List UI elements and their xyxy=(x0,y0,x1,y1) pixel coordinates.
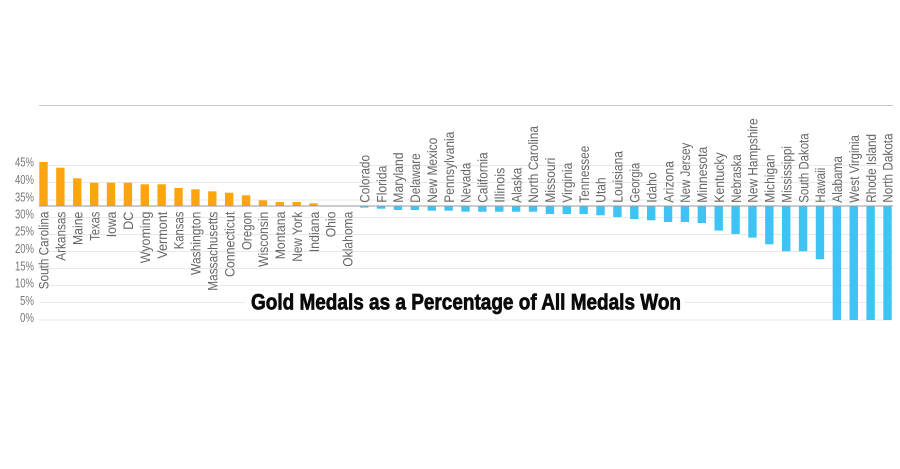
y axis labels: 0% xyxy=(20,310,34,325)
state labels above baseline: Maryland xyxy=(391,152,406,203)
state labels below baseline: Connecticut xyxy=(222,211,237,277)
state labels above baseline: Alaska xyxy=(509,167,524,203)
y axis labels: 40% xyxy=(15,172,34,187)
state labels above baseline: Florida xyxy=(374,165,389,203)
state labels above baseline: Arizona xyxy=(661,161,676,203)
blue bars: below average xyxy=(360,206,892,320)
y axis labels xyxy=(15,154,34,325)
y axis labels: 30% xyxy=(15,206,34,222)
state labels above baseline: Delaware xyxy=(408,153,423,203)
state labels below baseline: Iowa xyxy=(104,211,119,237)
state labels above baseline: Tennessee xyxy=(577,146,592,203)
state labels above baseline: Utah xyxy=(594,177,609,203)
state labels above baseline: Mississippi xyxy=(779,146,794,203)
state labels above baseline: Michigan xyxy=(762,154,778,203)
y axis labels: 5% xyxy=(20,293,34,308)
title: Gold Medals as a Percentage of All Medals Won xyxy=(251,289,681,314)
state labels below baseline: DC xyxy=(121,211,136,230)
state labels below baseline: Arkansas xyxy=(54,211,69,261)
state labels above baseline: North Carolina xyxy=(526,126,541,203)
y axis labels: 45% xyxy=(15,154,34,170)
y axis labels: 15% xyxy=(15,258,34,274)
state labels below baseline: Oklahoma xyxy=(340,211,356,267)
state labels below baseline: New York xyxy=(290,211,305,262)
state labels above baseline: New Mexico xyxy=(425,138,440,203)
state labels below baseline: Indiana xyxy=(307,211,322,252)
state labels above baseline: Illinois xyxy=(492,167,508,203)
state labels below baseline: Montana xyxy=(273,211,288,259)
state labels below baseline: Massachusetts xyxy=(206,211,220,291)
state labels below baseline: Wyoming xyxy=(138,212,153,263)
state labels above baseline: Nevada xyxy=(459,162,474,203)
y axis labels: 20% xyxy=(15,241,34,256)
state labels above baseline: Virginia xyxy=(560,162,575,203)
state labels below baseline: Oregon xyxy=(239,212,254,250)
state labels above baseline: Minnesota xyxy=(695,146,710,203)
y axis labels: 10% xyxy=(15,276,34,290)
state labels above baseline: Georgia xyxy=(628,162,642,203)
state labels above baseline: Hawaii xyxy=(813,168,828,203)
state labels above baseline: West Virginia xyxy=(847,135,862,203)
y axis labels: 35% xyxy=(15,190,34,204)
state labels above baseline: Idaho xyxy=(644,172,659,203)
orange bars: above average xyxy=(39,162,318,206)
state labels above baseline xyxy=(357,118,896,203)
state labels above baseline: Alabama xyxy=(830,156,845,203)
state labels below baseline: Texas xyxy=(87,212,102,241)
state labels below baseline: South Carolina xyxy=(37,211,52,289)
state labels below baseline: Kansas xyxy=(172,211,187,249)
state labels above baseline: Louisiana xyxy=(611,151,626,203)
state labels above baseline: Pennsylvania xyxy=(442,131,457,203)
state labels above baseline: Missouri xyxy=(543,158,558,203)
state labels below baseline: Wisconsin xyxy=(256,212,271,267)
state labels above baseline: North Dakota xyxy=(881,133,896,203)
y axis labels: 25% xyxy=(15,224,34,238)
state labels above baseline: Rhode Island xyxy=(864,134,879,203)
state labels above baseline: South Dakota xyxy=(796,133,811,203)
state labels above baseline: Nebraska xyxy=(729,154,744,203)
state labels above baseline: New Hampshire xyxy=(746,118,761,203)
state labels below baseline xyxy=(37,211,355,291)
state labels below baseline: Maine xyxy=(70,212,86,245)
state labels below baseline: Ohio xyxy=(324,212,339,237)
state labels below baseline: Washington xyxy=(189,212,204,275)
state labels above baseline: New Jersey xyxy=(678,142,693,203)
state labels above baseline: Colorado xyxy=(357,155,372,203)
state labels below baseline: Vermont xyxy=(155,211,170,259)
state labels above baseline: Kentucky xyxy=(712,152,727,203)
state labels above baseline: California xyxy=(476,152,491,203)
